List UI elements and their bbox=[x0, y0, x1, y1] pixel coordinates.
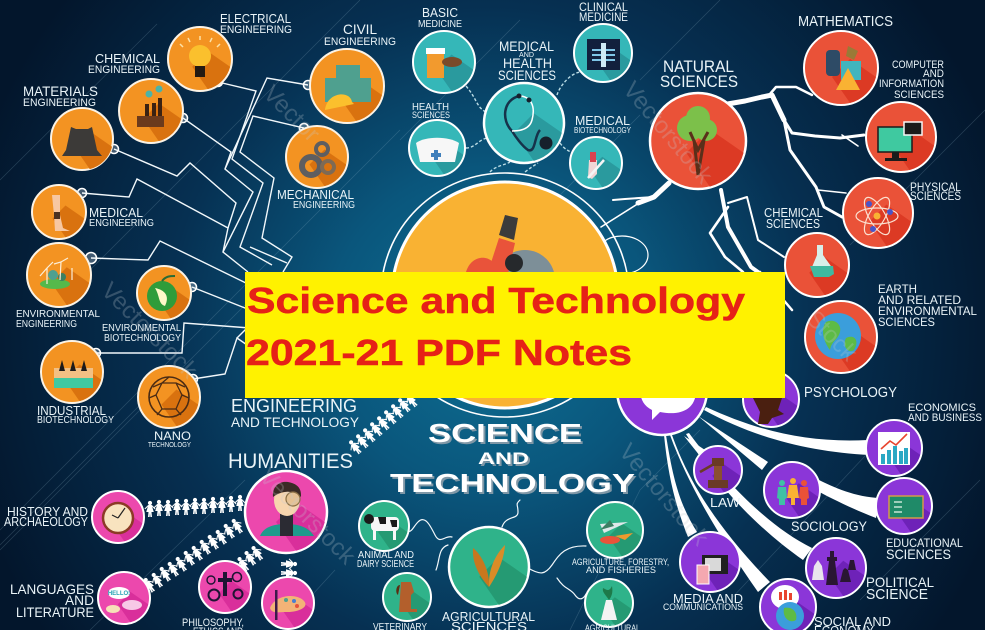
node: Medical and Health Sciences bbox=[484, 39, 564, 163]
central circle: science and technology emblem bbox=[381, 173, 648, 417]
node: Computer and Information Sciences: SCIENCES bbox=[894, 89, 944, 101]
node: Chemical Engineering: CHEMICAL bbox=[95, 51, 160, 66]
node: Physical Sciences bbox=[843, 178, 961, 248]
people chains bbox=[140, 390, 420, 595]
node: Health Sciences: SCIENCES bbox=[412, 110, 450, 120]
node: Medical and Health Sciences: SCIENCES bbox=[498, 67, 556, 83]
node: Arts bbox=[262, 577, 314, 629]
node: Medical Engineering: MEDICAL bbox=[89, 205, 143, 220]
node: Civil Engineering: ENGINEERING bbox=[324, 36, 396, 48]
heading: engineering and technology: AND TECHNOLOGY bbox=[231, 414, 360, 430]
node: Humanities bbox=[228, 450, 353, 553]
node: Languages (Hello) social sciences hub bbox=[617, 345, 707, 435]
node: Environmental Engineering: ENVIRONMENTAL bbox=[16, 308, 100, 320]
node: Philosophy, Ethics and Religion bbox=[182, 561, 251, 630]
node: Physical Sciences: SCIENCES bbox=[910, 189, 961, 203]
node: Agricultural Sciences bbox=[442, 527, 535, 630]
node: Animal and Dairy Science: DAIRY SCIENCE bbox=[357, 559, 414, 570]
watermarks: Vectorstock bbox=[617, 77, 718, 190]
title: science and technology emblem text: TECHNOLOGY bbox=[392, 470, 637, 500]
node: Social and Economy: SOCIAL AND bbox=[814, 614, 891, 629]
node: Materials Engineering: MATERIALS bbox=[23, 83, 98, 99]
node: Environmental Biotechnology: BIOTECHNOLOGY bbox=[104, 333, 181, 344]
node: Medical Engineering bbox=[32, 185, 154, 239]
node: Basic Medicine bbox=[413, 6, 475, 93]
node: Animal and Dairy Science bbox=[357, 501, 414, 570]
node: Health Sciences bbox=[409, 102, 465, 176]
node: Philosophy, Ethics and Religion: PHILOSOPHY, bbox=[182, 617, 244, 629]
node: Psychology bbox=[743, 371, 897, 427]
node: Environmental Engineering: ENGINEERING bbox=[16, 319, 77, 330]
node: Mechanical Engineering: ENGINEERING bbox=[293, 200, 355, 211]
heading: engineering and technology: ENGINEERING bbox=[231, 396, 357, 416]
node: Materials Engineering: ENGINEERING bbox=[23, 97, 96, 109]
node: Educational Sciences: EDUCATIONAL bbox=[886, 536, 963, 550]
node: Natural Sciences: SCIENCES bbox=[660, 72, 738, 91]
title: science and technology emblem text: SCIENCE bbox=[430, 420, 584, 450]
watermarks: Vectorstock bbox=[613, 439, 714, 552]
node: Mathematics: MATHEMATICS bbox=[798, 13, 893, 30]
title: science and technology emblem text bbox=[390, 418, 637, 500]
connector dots bbox=[78, 78, 312, 384]
node: History and Archaeology bbox=[4, 491, 144, 543]
node: History and Archaeology: HISTORY AND bbox=[7, 504, 88, 519]
node: Health Sciences: HEALTH bbox=[412, 102, 449, 113]
banner: yellow title box bbox=[245, 272, 785, 398]
node: Industrial Biotechnology: INDUSTRIAL bbox=[37, 403, 106, 418]
watermarks: Vectorstock bbox=[96, 277, 203, 385]
node: Nano Technology: NANO bbox=[154, 429, 191, 443]
node: Natural Sciences: NATURAL bbox=[663, 57, 734, 76]
node: Languages and Literature: AND bbox=[65, 592, 94, 608]
node: Chemical Sciences: CHEMICAL bbox=[764, 205, 823, 220]
node: Earth and Related Environmental Sciences bbox=[805, 282, 977, 373]
watermarks: Stock bbox=[801, 305, 863, 367]
node: Languages and Literature: LANGUAGES bbox=[10, 581, 94, 597]
node: Economics and Business bbox=[866, 402, 982, 476]
node: Nano Technology: TECHNOLOGY bbox=[148, 442, 191, 449]
node: Law: LAW bbox=[710, 495, 741, 510]
node: Languages and Literature: HELLO! bbox=[108, 591, 130, 597]
node: Electrical Engineering: ENGINEERING bbox=[220, 24, 292, 36]
node: Media and Communications: COMMUNICATIONS bbox=[663, 602, 743, 613]
node: Chemical Sciences: SCIENCES bbox=[766, 216, 820, 231]
title: science and technology emblem text: TECHNOLOGY bbox=[390, 468, 635, 498]
node: Environmental Biotechnology bbox=[102, 266, 191, 344]
node: Agriculture, Forestry and Fisheries bbox=[572, 502, 669, 576]
node: Political Science bbox=[806, 538, 934, 603]
node: Chemical Engineering bbox=[88, 51, 183, 143]
node: Economics and Business: ECONOMICS bbox=[908, 402, 976, 414]
node: Law bbox=[694, 446, 742, 510]
node: Physical Sciences: PHYSICAL bbox=[910, 180, 961, 194]
node: Medical and Health Sciences: AND bbox=[519, 52, 534, 59]
agricultural vines bbox=[400, 500, 586, 599]
node: Medical and Health Sciences: HEALTH bbox=[503, 55, 552, 71]
node: History and Archaeology: ARCHAEOLOGY bbox=[4, 514, 88, 529]
node: Veterinary Science bbox=[373, 573, 431, 630]
node: Mathematics bbox=[798, 13, 893, 105]
node: Earth and Related Environmental Sciences: AND RELATED bbox=[878, 293, 961, 307]
node: Medical and Health Sciences: MEDICAL bbox=[499, 39, 554, 54]
node: Computer and Information Sciences bbox=[866, 59, 944, 172]
node: Medical Biotechnology: MEDICAL bbox=[575, 113, 630, 128]
node: Earth and Related Environmental Sciences: EARTH bbox=[878, 282, 917, 296]
node: Electrical Engineering bbox=[168, 12, 292, 91]
node: Chemical Sciences bbox=[764, 205, 849, 297]
node: Industrial Biotechnology bbox=[37, 341, 114, 426]
node: Clinical Medicine: MEDICINE bbox=[579, 12, 628, 24]
node: Basic Medicine: MEDICINE bbox=[418, 19, 462, 30]
node: Civil Engineering bbox=[310, 21, 396, 123]
node: Educational Sciences: SCIENCES bbox=[886, 546, 951, 562]
node: Humanities: HUMANITIES bbox=[228, 450, 353, 473]
node: Environmental Engineering bbox=[16, 243, 100, 330]
node: Agriculture, Forestry and Fisheries: AGRICULTURE, FORESTRY, bbox=[572, 557, 669, 568]
node: Political Science: SCIENCE bbox=[866, 586, 928, 603]
node: Environmental Biotechnology: ENVIRONMENTAL bbox=[102, 323, 181, 334]
node: Clinical Medicine bbox=[574, 2, 632, 82]
node: Earth and Related Environmental Sciences: ENVIRONMENTAL bbox=[878, 304, 977, 318]
node: Agricultural Biotechnology bbox=[585, 579, 640, 630]
DNA strands bbox=[466, 72, 581, 172]
node: Basic Medicine: BASIC bbox=[422, 6, 458, 20]
heading: engineering and technology bbox=[231, 396, 360, 430]
social sciences tapered branches bbox=[664, 407, 880, 592]
node: Electrical Engineering: ELECTRICAL bbox=[220, 12, 291, 26]
node: Educational Sciences bbox=[876, 478, 963, 562]
watermarks bbox=[96, 77, 863, 571]
title: science and technology emblem text: AND bbox=[480, 451, 531, 470]
title: science and technology emblem text: SCIENCE bbox=[428, 418, 582, 448]
node: Medical Biotechnology bbox=[570, 113, 632, 189]
banner: yellow title box: Science and Technology bbox=[247, 280, 745, 321]
title: science and technology emblem text: AND bbox=[478, 449, 529, 468]
banner: yellow title box: 2021-21 PDF Notes bbox=[246, 332, 632, 373]
node: Agriculture, Forestry and Fisheries: AND FISHERIES bbox=[586, 565, 656, 576]
node: Psychology: PSYCHOLOGY bbox=[804, 385, 897, 401]
node: Materials Engineering bbox=[23, 83, 113, 170]
node: Computer and Information Sciences: INFORMATION bbox=[879, 78, 944, 90]
node: Computer and Information Sciences: COMPUTER bbox=[892, 59, 944, 71]
node: Languages and Literature bbox=[10, 572, 150, 624]
node: Civil Engineering: CIVIL bbox=[343, 21, 377, 37]
node: Natural Sciences bbox=[650, 57, 746, 189]
node: Sociology bbox=[764, 462, 867, 534]
node: Animal and Dairy Science: ANIMAL AND bbox=[358, 550, 414, 561]
node: Clinical Medicine: CLINICAL bbox=[579, 2, 629, 14]
node: Agricultural Sciences: AGRICULTURAL bbox=[442, 609, 535, 624]
watermarks: Vector bbox=[258, 80, 325, 147]
natural sciences branches bbox=[601, 87, 864, 310]
node: Mechanical Engineering: MECHANICAL bbox=[277, 188, 354, 202]
node: Industrial Biotechnology: BIOTECHNOLOGY bbox=[37, 415, 114, 426]
node: Medical Engineering: ENGINEERING bbox=[89, 218, 154, 229]
node: Computer and Information Sciences: AND bbox=[923, 68, 944, 80]
watermarks: Vectorstock bbox=[254, 463, 361, 571]
node: Media and Communications bbox=[663, 532, 743, 613]
node: Languages and Literature: LITERATURE bbox=[16, 604, 94, 620]
node: Earth and Related Environmental Sciences: SCIENCES bbox=[878, 315, 935, 329]
node: Media and Communications: MEDIA AND bbox=[673, 591, 743, 606]
node: Mechanical Engineering bbox=[277, 126, 355, 211]
engineering circuit lines bbox=[82, 78, 308, 379]
node: Sociology: SOCIOLOGY bbox=[791, 519, 867, 534]
node: Political Science: POLITICAL bbox=[866, 574, 934, 590]
node: Social and Economy bbox=[760, 579, 891, 630]
node: Medical Biotechnology: BIOTECHNOLOGY bbox=[574, 126, 632, 135]
node: Nano Technology bbox=[138, 366, 200, 449]
node: Chemical Engineering: ENGINEERING bbox=[88, 64, 160, 76]
